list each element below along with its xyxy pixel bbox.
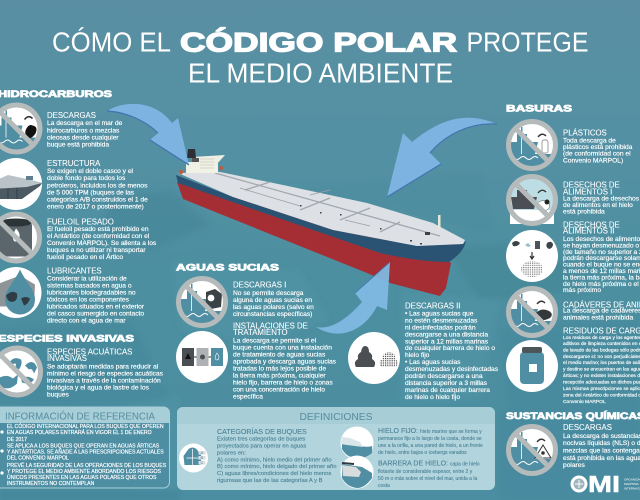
text: lubricantes: tóxicos en los componentes [47,297,130,304]
icon: lubricants [0,267,42,318]
text: plasticos: Convenio MARPOL) [563,157,623,164]
text: reference notes: DEL CONVENIO MARPOL [7,456,69,462]
title [52,26,588,88]
text: lubricantes: LUBRICANTES [47,266,102,275]
text: barrera de hielo: flotante de considerable espesor, entre 2 y [378,469,473,475]
panel: definitions [177,407,495,490]
text: descargas II: distancia superior a 3 millas [405,380,488,387]
text: instalaciones de tratamiento: de tratamiento de aguas sucias [233,351,326,358]
icon: fast ice [340,426,374,460]
panel: hydrocarbons [0,89,157,325]
heading: definiciones: DEFINICIONES [300,412,373,423]
icon: no animal carcasses [506,288,558,341]
panel: sewage [176,263,499,401]
text: instalaciones de tratamiento: La descarga se permite si el [233,337,317,344]
title: CÓDIGO POLAR [180,26,457,58]
text: especies acuaticas: ESPECIES ACUÁTICAS [47,347,132,356]
icon: shredded food waste [506,230,558,282]
text: reference notes: ÚNICOS PRESENTES EN LAS AGUAS POLARES QUE OTROS [7,474,157,481]
text: instalaciones de tratamiento: tratadas lo más lejos posible de [233,365,326,372]
logo: OMI: MARÍTIMA [624,482,639,486]
text: descargas I: las aguas polares (salvo en [233,304,314,311]
text: plasticos: Toda descarga de [563,137,616,144]
text: descargas II: hielo fijo [405,352,430,359]
title: CÓMO EL [52,26,171,58]
logo: OMI: MI [588,471,620,497]
text: descargas II: no estén desmenuzadas [405,318,478,325]
text: categorias de buques: rigurosas que las de las categorías A y B [217,478,323,484]
tanker ship [176,149,466,296]
icon: treatment plant [176,331,228,383]
heading: sustancias quimicas: SUSTANCIAS QUÍMICAS [506,411,640,422]
text: barrera de hielo: costa [378,483,390,489]
text: hielo fijo: une a la orilla, a una pared de hielo, a un frente [378,443,483,449]
text: categorias de buques: polares en: [217,450,246,456]
text: descargas quimicas: polares [563,462,585,469]
text: instalaciones de tratamiento: TRATAMIENTO [233,328,288,337]
text: barrera de hielo: BARRERA DE HIELO: [378,460,450,468]
text: hielo fijo: HIELO FIJO: [378,428,420,435]
panel: chemical substances [506,411,640,479]
text: hielo fijo: de hielo, entre bajos o icebergs varados [378,450,467,456]
text: categorias de buques: Existen tres categorías de buques [217,436,305,442]
text: especies acuaticas: invasivas a través de la contaminación [47,378,161,384]
text: desechos I: DESECHOS DE [563,181,620,190]
text: descargas: La descarga en el mar de [47,120,123,127]
text: especies acuaticas: mínimo el riesgo de especies acuáticas [47,370,164,377]
text: fueloil pesado: fueloil pesado en el Ártico [47,252,123,261]
title: PROTEGE [466,26,588,58]
text: descargas: hidrocarburos o mezclas [47,127,120,134]
text: plasticos: PLÁSTICOS [563,129,607,138]
text: especies acuaticas: biológica y el agua de lastre de los [47,385,150,392]
text: estructura: enero de 2017 o posteriormente) [47,203,144,210]
text: lubricantes: lubricantes biodegradables no [47,290,136,297]
icon: no food waste in ice [508,176,556,224]
icon: ice barrier [340,456,374,488]
text: descargas quimicas: DESCARGAS [563,423,612,432]
text: descargas quimicas: La descarga de sustancias [563,433,640,440]
text: reference notes: EL CÓDIGO INTERNACIONAL PARA LOS BUQUES QUE OPEREN [7,423,164,430]
text: descargas II: descargarse a una distancia [405,332,488,339]
text: descargas: DESCARGAS [47,111,96,120]
text: reference notes: Y PROTEGE EL MEDIO AMBIENTE ABORDANDO LOS RIESGOS [7,469,162,475]
text: estructura: doble fondo para todos los [47,175,126,182]
text: especies acuaticas: Se adoptarán medidas para reducir al [47,363,159,370]
heading: hidrocarburos: HIDROCARBUROS [0,89,112,100]
text: descargas II: de hielo o hielo fijo [405,394,460,401]
icon: no invasive species [0,348,40,395]
icon: double hull [0,158,42,210]
heading: especies invasivas: ESPECIES INVASIVAS [0,334,134,345]
text: desechos I: La descarga de desechos [563,196,640,203]
arrow: from garbage to ship [387,118,497,197]
arrow: from hydrocarbons to ship [107,104,189,165]
text: categorias de buques: B) como mínimo, hielo delgado del primer año [217,464,337,470]
panel: invasive species [0,334,164,399]
text: categorias de buques: A) como mínimo, hielo medio del primer año [217,458,332,464]
text: descargas II: marinas de cualquier barrera [405,387,490,394]
icon: no heavy fuel oil [0,214,40,261]
text: plasticos: (de conformidad con el [563,151,631,158]
icon: ship categories: C [200,460,204,465]
text: instalaciones de tratamiento: INSTALACIONES DE [233,321,308,330]
text: reference notes: INSTRUMENTOS NO CONTEMPLAN [7,481,95,487]
text: especies acuaticas: buques [47,392,69,399]
text: descargas II: DESCARGAS II [405,301,460,310]
text: reference notes: EN AGUAS POLARES ENTRARÁ EN VIGOR EL 1 DE ENERO [7,429,152,436]
text: fueloil pesado: buques a no utilizar ni transportar [47,247,146,254]
text: estructura: Se exigen el doble casco y el [47,168,134,175]
text: fueloil pesado: el Antártico (de conformidad con el [47,233,150,240]
text: descargas I: circunstancias específicas) [233,311,312,318]
text: descargas I: DESCARGAS I [233,281,286,290]
icon: no chemical discharge [506,426,558,479]
text: descargas II: desmenuzadas y desinfectadas [405,366,499,373]
text: descargas: buque está prohibida [47,142,109,148]
text: residuos de carga: Convenio MARPOL [563,399,606,405]
heading: basuras: BASURAS [506,104,572,115]
text: instalaciones de tratamiento: la tierra más próxima, cualquier [233,372,326,379]
icon: cargo residues drum [506,340,558,392]
text: descargas I: No se permite descarga [233,290,304,297]
text: desechos II: más próximo [563,287,601,294]
text: descargas II: podrán descargarse a una [405,373,483,380]
text: estructura: de 5 000 TPM (buques de las [47,189,135,196]
arrow: from sewage to ship [316,262,390,334]
text: descargas: oleosas desde cualquier [47,134,119,141]
text: categorias de buques: C) aguas libres/condiciones del hielo menos [217,471,331,477]
icon: no sewage discharge [176,278,228,331]
text: lubricantes: lubricados situados en el exterior [47,304,145,311]
icon: ship categories: A [200,450,204,455]
text: lubricantes: directo con el agua de mar [47,318,126,325]
text: desechos I: ALIMENTOS I [563,187,612,196]
text: reference notes: Y ANTÁRTICAS. SE AÑADE A LAS PRESCRIPCIONES ACTUALES [7,448,164,456]
title: EL MEDIO AMBIENTE [188,58,453,88]
text: desechos II: DESECHOS DE [563,221,620,230]
text: fueloil pesado: FUELOIL PESADO [47,217,114,226]
text: fueloil pesado: El fueloil pesado está prohibido en [47,226,149,233]
icon: bullets [0,430,4,475]
text: estructura: ESTRUCTURA [47,159,101,168]
heading: informacion de referencia: INFORMACIÓN DE REFERENCIA [5,409,155,422]
text: reference notes: PREVÉ LA SEGURIDAD DE LAS OPERACIONES DE LOS BUQUES [7,462,167,469]
text: hielo fijo: permanece fijo a lo largo de la costa, donde se [378,436,482,442]
text: descargas I: alguna de aguas sucias en [233,297,312,304]
text: instalaciones de tratamiento: con una concentración de hielo [233,386,325,393]
icon: sewage piles [348,332,400,384]
text: instalaciones de tratamiento: específica [233,393,263,400]
text: instalaciones de tratamiento: buque cuenta con una instalación [233,344,332,351]
text: fueloil pesado: Convenio MARPOL). Se alienta a los [47,240,157,247]
text: descargas II: de cualquier barrera de hielo o [405,345,495,352]
text: descargas II: superior a 12 millas marinas [405,338,489,345]
text: instalaciones de tratamiento: aprobada y descarga aguas sucias [233,358,337,365]
text: instalaciones de tratamiento: hielo fijo, barrera de hielo o zonas [233,379,333,386]
icon: no oil discharge [0,105,42,158]
heading: aguas sucias: AGUAS SUCIAS [176,263,279,274]
text: plasticos: plásticos está prohibida [563,144,633,151]
text: desechos II: ALIMENTOS II [563,226,614,236]
text: lubricantes: sistemas basados en agua o [47,283,132,290]
text: estructura: categorías A/B construidos el 1 de [47,196,148,203]
text: reference notes: DE 2017 [7,437,27,443]
text: descargas II: • Las aguas sucias [405,359,461,366]
text: barrera de hielo: capa de hielo [450,462,480,468]
text: descargas II: ni desinfectadas podrán [405,325,476,332]
text: reference notes: SE APLICA A LOS BUQUES QUE OPERAN EN AGUAS ÁRTICAS [7,442,160,450]
text: especies acuaticas: INVASIVAS [47,354,87,363]
text: categorias de buques: proyectados para operar en aguas [217,444,306,450]
text: categorias de buques: CATEGORÍAS DE BUQUES [217,427,307,436]
text: estructura: petroleros, incluidos los de menos [47,182,148,189]
logo: OMI [570,471,640,497]
text: desechos I: está prohibida [563,209,605,216]
panel: garbage [506,104,640,405]
text: descargas II: • Las aguas sucias que [405,311,474,318]
text: cadaveres: animales está prohibida [563,314,633,321]
text: barrera de hielo: 50 m o más sobre el nivel del mar, unida a la [378,476,477,482]
icon: ship categories: B [200,455,204,460]
text: lubricantes: del casco sumergido en contacto [47,311,144,318]
text: desechos I: de alimentos en el hielo [563,202,633,209]
icon: no plastics [506,122,558,174]
text: lubricantes: Considerar la utilización de [47,276,127,283]
text: hielo fijo: hielo marino que se forma y [420,429,482,435]
icon: ship categories [179,444,208,472]
panel: reference information [0,407,170,488]
